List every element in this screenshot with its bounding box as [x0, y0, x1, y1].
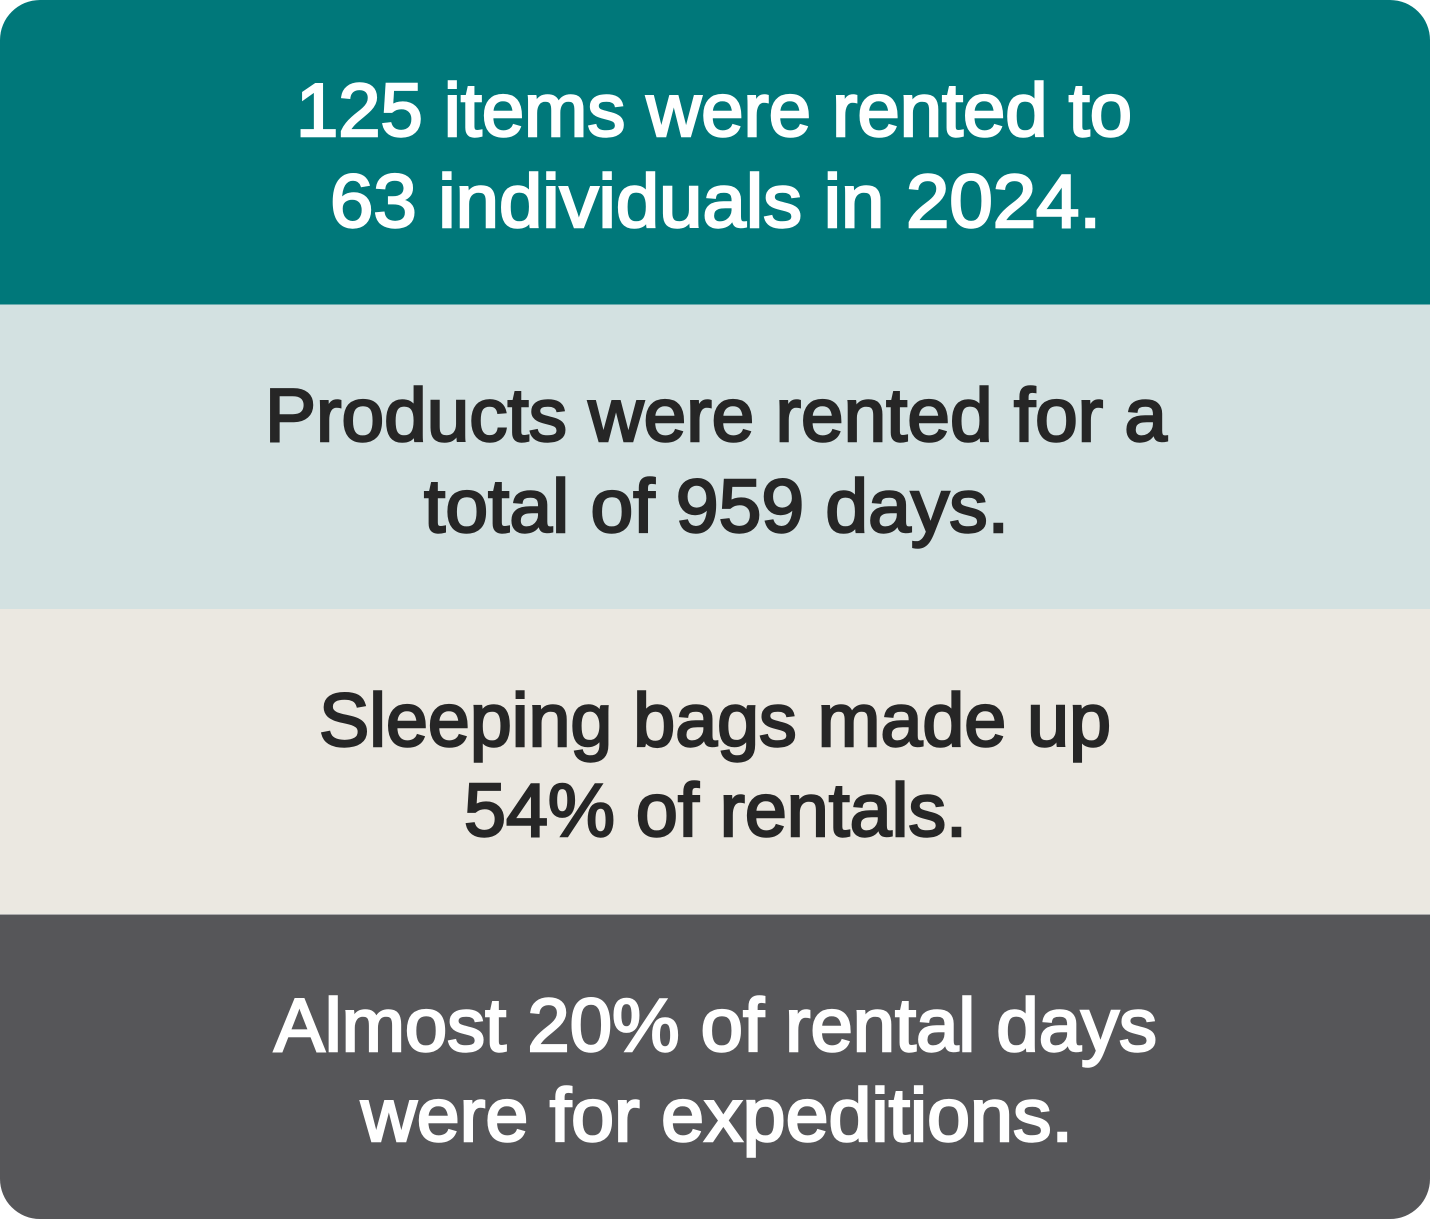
text: expeditions statement: Almost 20% of rental days — [274, 983, 1157, 1067]
text: 959 days statement: total of 959 days. — [424, 464, 1009, 548]
panel: 125 items rented — [0, 0, 1430, 304]
text: 125 items statement — [296, 68, 1132, 243]
text: sleeping bags statement: 54% of rentals. — [464, 768, 967, 852]
panel: expeditions share — [0, 914, 1430, 1219]
text: 125 items statement: 63 individuals in 2024. — [330, 159, 1101, 243]
text: 125 items statement: 125 items were rented to — [296, 68, 1132, 152]
text: sleeping bags statement: Sleeping bags made up — [319, 678, 1111, 762]
panel: 959 rental days — [0, 304, 1430, 609]
panel: sleeping bags share — [0, 609, 1430, 914]
text: expeditions statement — [274, 983, 1157, 1157]
text: 959 days statement: Products were rented for a — [265, 373, 1167, 457]
text: 959 days statement — [265, 373, 1167, 548]
text: expeditions statement: were for expeditions. — [360, 1073, 1073, 1157]
text: sleeping bags statement — [319, 678, 1111, 852]
